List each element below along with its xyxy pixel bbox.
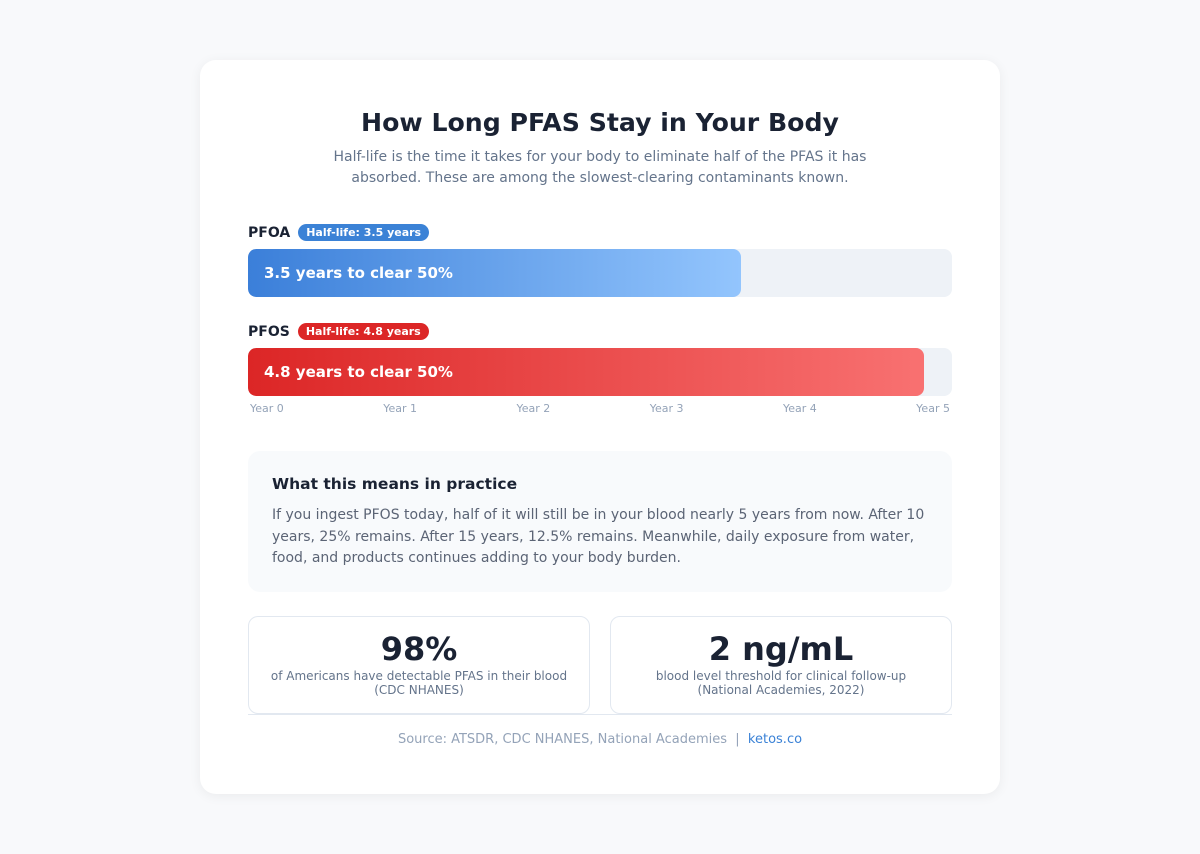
axis labels: Year 3: [650, 402, 684, 415]
bar: PFOA: [248, 249, 952, 297]
axis labels: Year 1: [383, 402, 417, 415]
axis labels: Year 4: [783, 402, 817, 415]
stat: 98%: of Americans have detectable PFAS in their blood: [271, 669, 567, 683]
axis labels: Year 0: [250, 402, 284, 415]
label: PFOA: [248, 224, 429, 241]
bar: PFOS: 4.8 years to clear 50%: [264, 363, 453, 381]
axis labels: [250, 402, 950, 415]
stat: 2 ng/mL: [610, 616, 952, 714]
label: PFOS: PFOS: [248, 324, 290, 340]
title: How Long PFAS Stay in Your Body: [361, 108, 839, 137]
label: PFOS: [248, 323, 429, 340]
card: [200, 60, 1000, 794]
source: Source: ATSDR, CDC NHANES, National Academies | ketos.co: [398, 732, 802, 747]
stat: 2 ng/mL: 2 ng/mL: [709, 630, 853, 668]
label: PFOA: Half-life: 3.5 years: [306, 226, 421, 239]
stat: 98%: 98%: [381, 630, 457, 668]
stat: 2 ng/mL: blood level threshold for clinical follow-up: [656, 669, 906, 683]
subtitle: Half-life is the time it takes for your body to eliminate half of the PFAS it has absorbed. These are among the slowest-clearing contaminants known.: [334, 149, 866, 186]
panel: practice: [248, 451, 952, 592]
panel: practice: What this means in practice: [272, 475, 517, 493]
axis labels: Year 5: [916, 402, 950, 415]
bar: PFOA: 3.5 years to clear 50%: [264, 264, 453, 282]
panel: practice: If you ingest PFOS today, half of it will still be in your blood nearly 5 years from now. After 10 years, 25% remains. After 15 years, 12.5% remains. Meanwhile, daily exposure from water, food, and products continues adding to your body burden.: [272, 507, 924, 566]
bar: PFOS: [248, 348, 952, 396]
stat: 98%: (CDC NHANES): [374, 683, 464, 697]
stat: 2 ng/mL: (National Academies, 2022): [698, 683, 864, 697]
axis labels: Year 2: [516, 402, 550, 415]
stat: 98%: [248, 616, 590, 714]
label: PFOA: PFOA: [248, 224, 290, 240]
label: PFOS: Half-life: 4.8 years: [306, 325, 421, 338]
